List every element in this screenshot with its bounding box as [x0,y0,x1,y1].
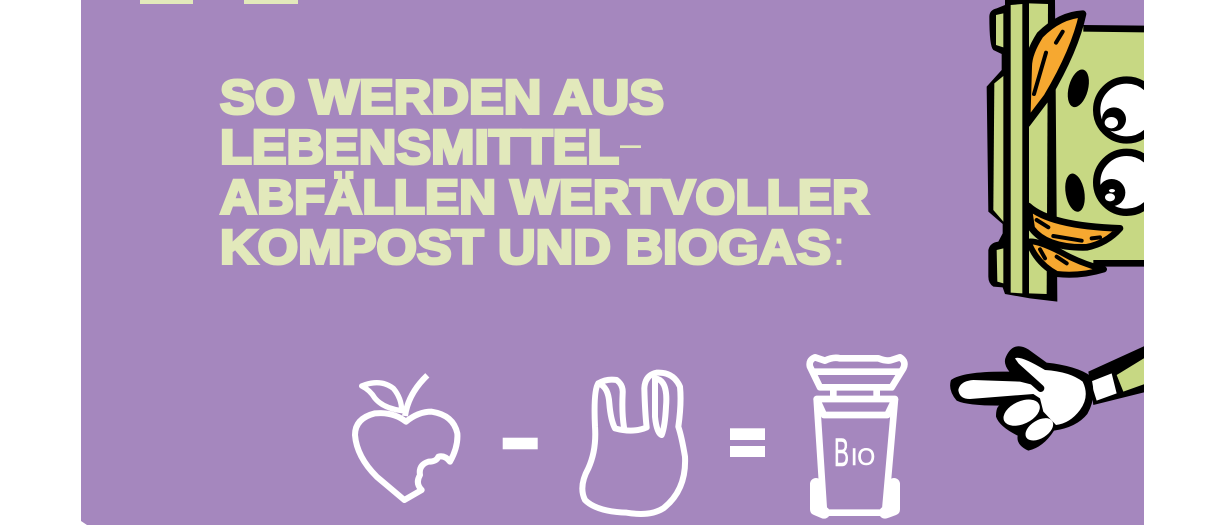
bin body [1048,25,1144,265]
mascot: green bin peeking in [987,0,1157,302]
heading [220,72,869,276]
mascot: pointing hand and arm [950,345,1147,451]
banana peel: bottom [1028,206,1120,275]
minus sign [503,438,538,449]
cropped heading letters at top edge [140,0,298,4]
eye: lower [1097,152,1157,212]
eyebrows [1065,70,1089,212]
icon: bitten apple heart [355,375,457,500]
heading: SO WERDEN AUS [220,72,664,124]
equals sign [730,428,765,457]
bin label [834,431,875,475]
heading: : [832,220,846,276]
heading: KOMPOST UND BIOGAS [220,222,831,274]
eye: upper [1097,80,1157,140]
icon: organic waste bin [810,357,904,513]
heading: ABFÄLLEN WERTVOLLER [220,172,869,224]
bin label: B [834,431,849,475]
bin label: IO [851,444,875,471]
bin lid [987,0,1057,302]
banana peel: top [1027,14,1083,124]
heading: – [620,122,642,166]
icon: plastic bag [582,373,685,514]
heading: LEBENSMITTEL [220,122,619,174]
